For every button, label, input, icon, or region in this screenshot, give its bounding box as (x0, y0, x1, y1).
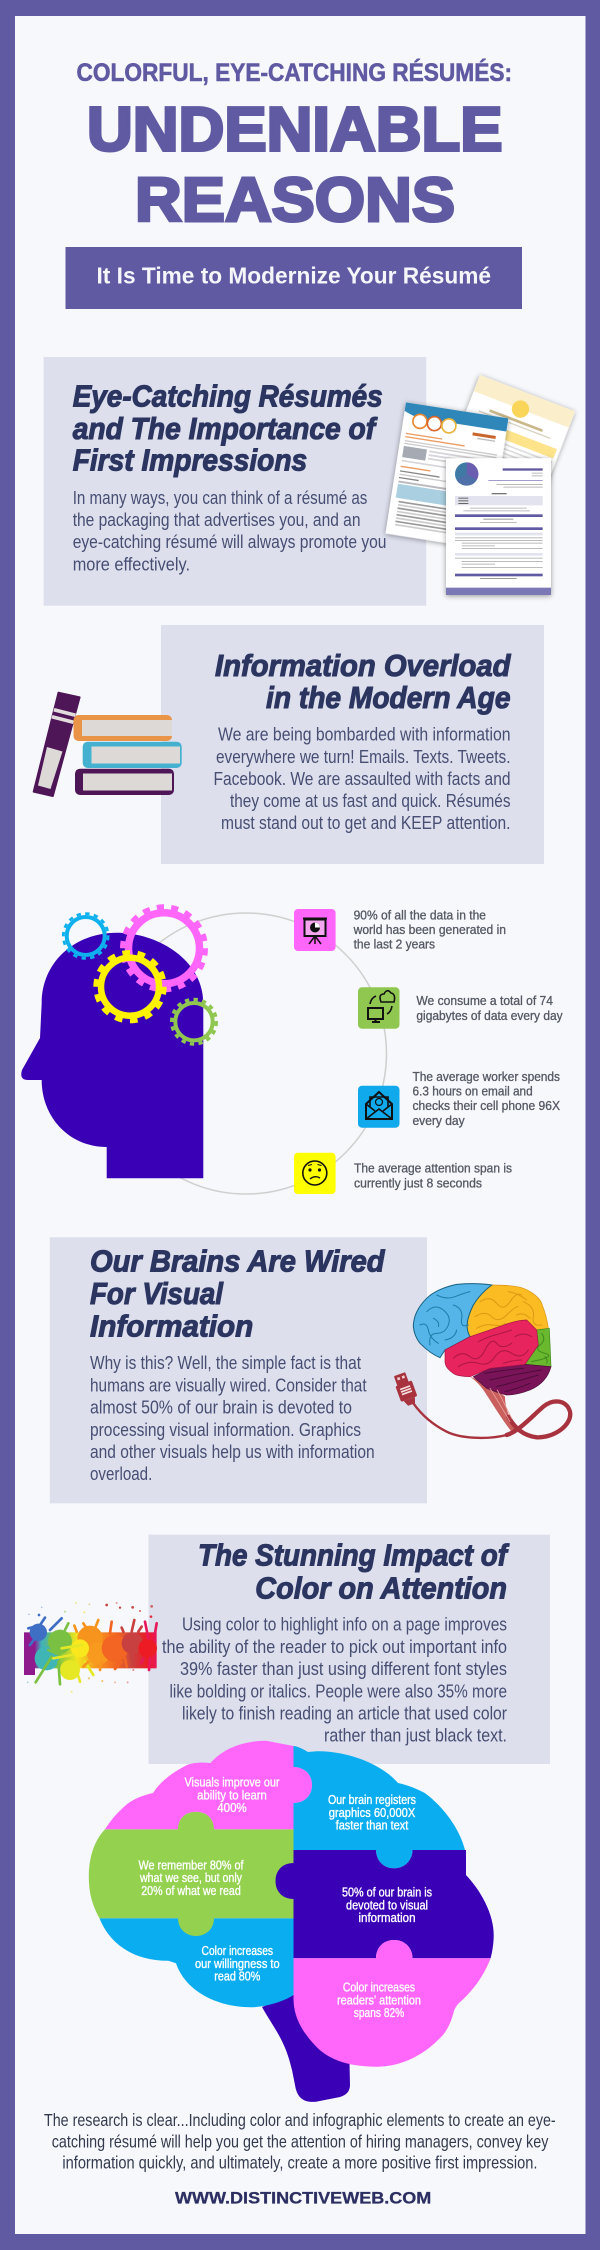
gear: blue (63, 914, 108, 958)
heading: For Visual (90, 1276, 224, 1311)
puzzle labels: 20% of what we read (141, 1883, 241, 1898)
panel: brains are wired (50, 1237, 427, 1503)
stat text 3: 6.3 hours on email and (412, 1085, 533, 1099)
stat text 2: gigabytes of data every day (416, 1009, 563, 1023)
subtitle banner (66, 247, 522, 309)
gear: pink (122, 907, 206, 990)
heading: Color on Attention (255, 1570, 507, 1605)
body text: they come at us fast and quick. Résumés (230, 790, 510, 811)
puzzle labels: faster than text (336, 1818, 409, 1832)
body text: Facebook. We are assaulted with facts and (214, 768, 510, 789)
lobe: red (445, 1320, 538, 1377)
stat text 4: currently just 8 seconds (354, 1177, 482, 1191)
USB plug (392, 1371, 419, 1408)
body text: overload. (90, 1463, 152, 1484)
icon: email envelope (358, 1086, 400, 1128)
heading: First Impressions (73, 443, 307, 478)
image: rainbow paint splash (24, 1602, 157, 1693)
heading: Information Overload (215, 648, 512, 683)
brain stem (470, 1377, 518, 1432)
stat text 1: 90% of all the data in the (354, 908, 486, 922)
heading (90, 1244, 386, 1344)
gear: yellow (96, 952, 164, 1021)
stat text 4 (354, 1162, 512, 1191)
lobe: blue (413, 1284, 492, 1358)
icon: stack of books (34, 693, 182, 796)
cable (413, 1401, 570, 1438)
kicker heading: COLORFUL, EYE-CATCHING RÉSUMÉS: (76, 58, 512, 87)
icon: worried face (294, 1153, 336, 1194)
body text (214, 724, 510, 833)
body text (73, 487, 386, 575)
body text: rather than just black text. (324, 1725, 507, 1746)
label: learn: Visuals improve our (184, 1775, 280, 1790)
icon: colourful brain with USB cable (392, 1284, 570, 1438)
piece: pink lower right (294, 1940, 491, 2067)
image: stack of resumes (385, 375, 575, 595)
heading: and The Importance of (73, 411, 378, 446)
main title line 2: REASONS (135, 166, 455, 235)
heading (215, 648, 512, 715)
body text: the ability of the reader to pick out important info (162, 1636, 507, 1657)
puzzle labels: ability to learn (197, 1787, 267, 1802)
stat text 1: the last 2 years (354, 938, 435, 952)
body text: the packaging that advertises you, and an (73, 509, 360, 530)
body text: humans are visually wired. Consider that (90, 1375, 367, 1396)
stat text 3: The average worker spends (412, 1070, 560, 1084)
stat text 1: world has been generated in (353, 923, 506, 937)
heading: Eye-Catching Résumés (73, 379, 383, 414)
piece: purple right (276, 1850, 494, 1958)
panel: impact of color (148, 1535, 550, 1764)
closing text (44, 2110, 556, 2172)
leaning book (34, 693, 80, 796)
chart: puzzle brain (89, 1741, 494, 2102)
body text: In many ways, you can think of a résumé as (73, 487, 367, 508)
body text: must stand out to get and KEEP attention. (221, 812, 510, 833)
body text: 39% faster than just using different font styles (180, 1658, 507, 1679)
puzzle labels: information (358, 1910, 416, 1925)
body text: and other visuals help us with information (90, 1441, 375, 1462)
stat text 2: We consume a total of 74 (416, 994, 553, 1008)
resume: yellow, back (441, 375, 575, 514)
puzzle labels: our willingness to (195, 1956, 280, 1971)
gear: green (172, 999, 216, 1044)
puzzle labels: what we see, but only (139, 1870, 242, 1885)
piece: light blue upper right (294, 1746, 465, 1868)
heading: The Stunning Impact of (198, 1538, 509, 1573)
body text: Using color to highlight info on a page improves (182, 1614, 507, 1635)
body text: more effectively. (73, 554, 190, 575)
brain folds (420, 1292, 549, 1422)
title block (76, 58, 512, 235)
chart: data circle with head and stats (21, 907, 563, 1194)
piece: pink upper left (105, 1741, 312, 1829)
heading: Information (90, 1309, 253, 1344)
body text: We are being bombarded with information (218, 724, 510, 745)
blue book (83, 742, 182, 768)
stat text 3 (412, 1070, 561, 1128)
body text: almost 50% of our brain is devoted to (90, 1397, 352, 1418)
body text: Why is this? Well, the simple fact is that (90, 1352, 361, 1373)
stat text 3: checks their cell phone 96X (412, 1099, 561, 1113)
puzzle labels: read 80% (214, 1969, 261, 1984)
puzzle labels: spans 82% (354, 2005, 405, 2020)
piece: green left (89, 1812, 294, 1936)
icon: head silhouette (21, 933, 203, 1178)
puzzle labels: devoted to visual (346, 1897, 428, 1912)
body text: processing visual information. Graphics (90, 1419, 361, 1440)
label: attention: Color increases (343, 1980, 416, 1995)
resume: purple, front (446, 458, 551, 595)
stat text 1 (353, 908, 506, 952)
heading (198, 1538, 509, 1605)
connecting circle (106, 913, 386, 1194)
body text: eye-catching résumé will always promote you (73, 531, 386, 552)
puzzle labels: readers' attention (337, 1992, 421, 2007)
body text: likely to finish reading an article that used color (182, 1703, 507, 1724)
panel: eye-catching resumes (44, 357, 426, 606)
puzzle labels: 400% (217, 1800, 247, 1815)
label: remember: We remember 80% of (138, 1857, 244, 1872)
lobe: green (525, 1328, 551, 1367)
main title line 1: UNDENIABLE (87, 96, 502, 164)
subtitle banner: It Is Time to Modernize Your Résumé (96, 262, 491, 288)
website URL: WWW.DISTINCTIVEWEB.COM (175, 2188, 431, 2207)
label: devoted: 50% of our brain is (342, 1885, 432, 1900)
lobe: yellow (467, 1285, 548, 1337)
heading: Our Brains Are Wired (90, 1244, 386, 1279)
body text (162, 1614, 507, 1746)
purple book (75, 769, 174, 795)
puzzle labels (138, 1775, 432, 2020)
stat text 4: The average attention span is (354, 1162, 512, 1176)
body text (90, 1352, 375, 1484)
stat text 3: every day (412, 1114, 465, 1128)
stat text 2 (416, 994, 563, 1023)
brain stem (262, 1990, 350, 2102)
puzzle labels: graphics 60,000X (329, 1805, 416, 1820)
panel: information overload (161, 625, 544, 864)
label: willingness: Color increases (202, 1943, 273, 1958)
body text: everywhere we turn! Emails. Texts. Tweets. (216, 746, 510, 767)
body text: like bolding or italics. People were also 35% more (170, 1680, 507, 1701)
orange book (74, 715, 172, 741)
heading: in the Modern Age (266, 680, 510, 715)
icon: cloud and monitor (358, 987, 400, 1029)
piece: light blue lower left (100, 1918, 294, 2007)
icon: presentation board (294, 909, 336, 951)
label: graphics: Our brain registers (328, 1792, 416, 1807)
heading (73, 379, 383, 478)
resume: blue, middle (385, 402, 508, 549)
lobe: purple (473, 1364, 551, 1395)
